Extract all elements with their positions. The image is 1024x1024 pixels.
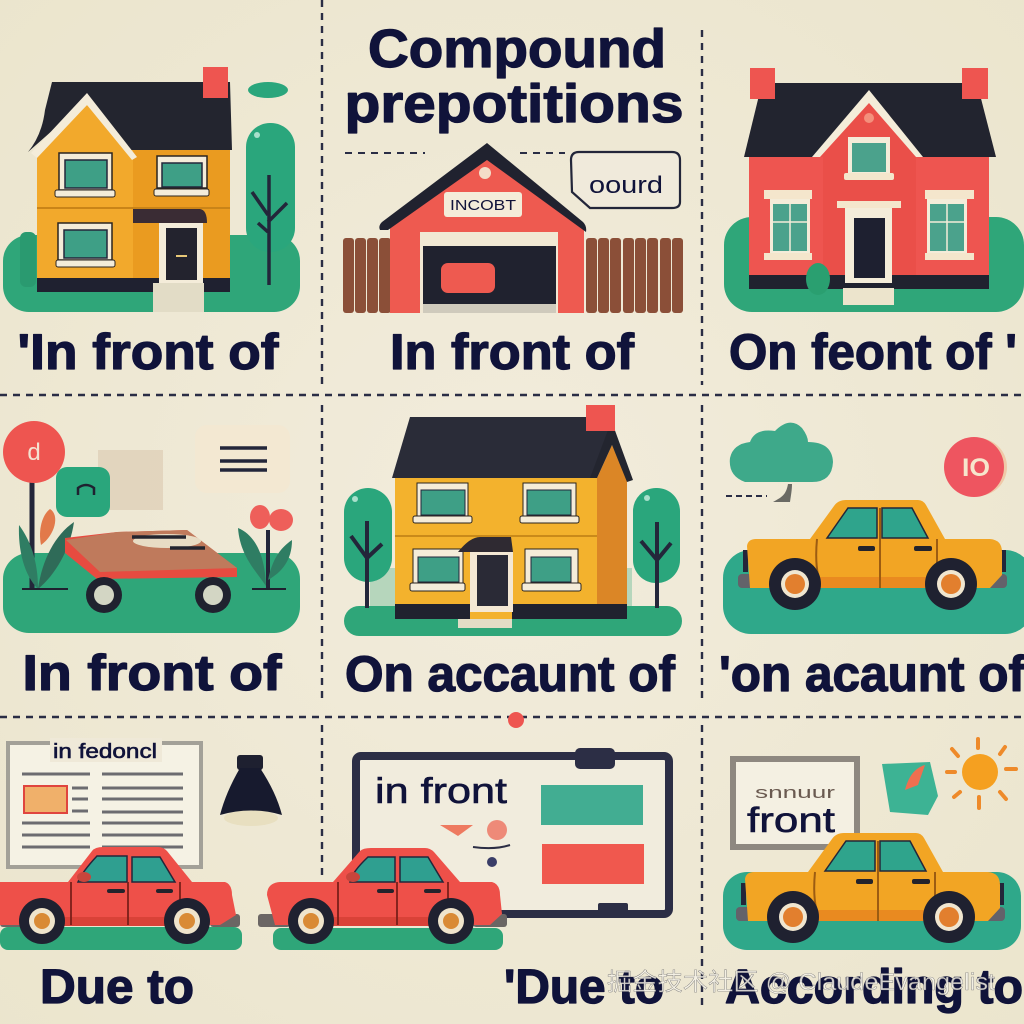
watermark: 掘金技术社区 @ ClaudeEvangelist xyxy=(607,969,995,996)
title xyxy=(344,19,684,134)
panel: red garage top middle xyxy=(343,143,683,313)
label: on acaunt of: 'on acaunt of xyxy=(719,646,1024,702)
left plant xyxy=(3,421,74,589)
panel: document and car bottom left: in fedoncl xyxy=(53,741,157,763)
label: on feont of: On feont of ' xyxy=(729,324,1017,380)
label: in front of 3: In front of xyxy=(22,645,282,701)
panel: red house top right xyxy=(724,68,1024,312)
panel: sign and car bottom right: front xyxy=(747,801,835,840)
icon: tree xyxy=(246,123,295,285)
fence left xyxy=(343,238,391,313)
panel: orange house top left xyxy=(3,67,300,312)
label: due to 2: 'Due to xyxy=(504,961,664,1014)
icon: sun xyxy=(947,739,1016,808)
sign xyxy=(571,152,680,208)
panel: sign and car bottom right xyxy=(723,739,1021,950)
sign: oourd xyxy=(589,172,663,199)
icon: map xyxy=(882,762,938,815)
label: due to 1: Due to xyxy=(40,961,194,1014)
label: on accaunt of: On accaunt of xyxy=(345,646,675,702)
label: according to: According to xyxy=(725,961,1023,1014)
title: Compound xyxy=(368,19,666,79)
right plant xyxy=(238,505,293,589)
panel: garden cart middle left xyxy=(3,421,300,633)
icon: cloud tree xyxy=(726,423,833,502)
panel: yellow car middle right xyxy=(723,423,1024,634)
cart xyxy=(65,530,237,613)
badge xyxy=(944,437,1007,497)
icon: lamp xyxy=(220,755,282,826)
fence right xyxy=(586,238,683,313)
label: in front of 2: In front of xyxy=(390,324,634,380)
title: prepotitions xyxy=(344,74,684,134)
panel: board and car bottom middle: in front xyxy=(375,770,507,811)
panel: board and car bottom middle xyxy=(258,712,669,950)
panel: yellow house centre xyxy=(344,405,682,636)
panel: red garage top middle: INCOBT xyxy=(450,197,516,214)
yellow car xyxy=(738,500,1007,610)
label: in front of 1: 'In front of xyxy=(18,324,279,380)
panel: sign and car bottom right: snnuur xyxy=(755,783,836,802)
left plant: d xyxy=(27,439,41,466)
badge: IO xyxy=(962,454,990,482)
panel: document and car bottom left xyxy=(0,738,282,950)
yellow car xyxy=(736,833,1005,943)
